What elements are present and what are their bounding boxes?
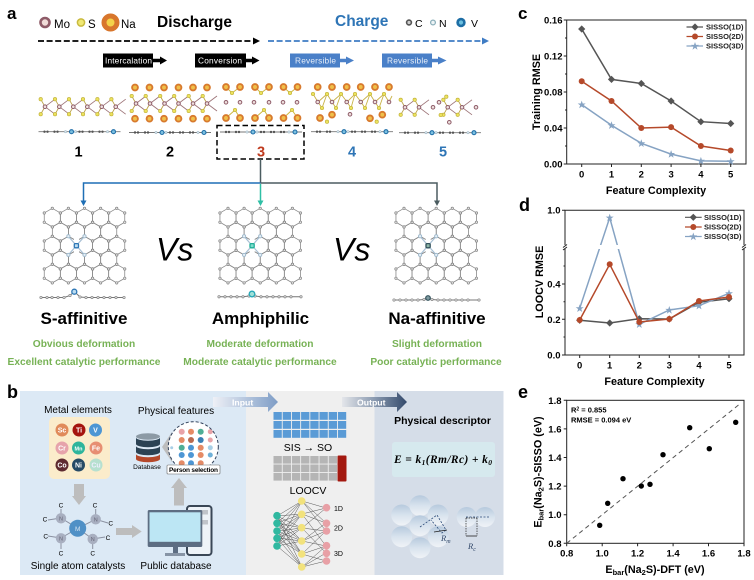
legend: C N V atoms: N xyxy=(439,18,447,30)
fit statistics: RMSE = 0.094 eV xyxy=(571,416,631,424)
single atom catalyst molecule: C xyxy=(108,520,113,528)
lattice: Amphiphilic side view xyxy=(219,291,301,297)
y tick labels: 1.8 xyxy=(548,396,562,407)
note: Moderate catalytic performance: Moderate catalytic performance xyxy=(183,357,337,368)
label: 3D: 3D xyxy=(334,551,343,558)
legend xyxy=(685,213,742,241)
x tick labels: 1.6 xyxy=(702,549,715,560)
state number 5: 5 xyxy=(439,144,447,160)
legend: SISSO(2D) xyxy=(706,32,744,41)
panel label b: b xyxy=(7,382,18,402)
y tick labels: 1.2 xyxy=(548,482,562,493)
arrow: Output: Output xyxy=(357,398,386,408)
x tick labels xyxy=(579,170,734,180)
y tick labels: 0.12 xyxy=(544,52,562,62)
x tick labels: 1.4 xyxy=(666,549,680,560)
state number 1: 1 xyxy=(74,144,83,160)
x axis title: Feature Complexity xyxy=(606,185,706,197)
legend: SISSO(1D) xyxy=(704,213,742,222)
periodic element card: Cu xyxy=(91,462,101,470)
note: Obvious deformation: Obvious deformation xyxy=(33,339,135,350)
x tick labels: 2 xyxy=(639,170,644,180)
note: Moderate deformation: Moderate deformation xyxy=(207,339,313,350)
y tick labels xyxy=(544,16,563,170)
x tick labels: 1 xyxy=(607,360,613,372)
neural network xyxy=(273,497,330,571)
x tick labels: 0 xyxy=(577,360,582,372)
y axis title: LOOCV RMSE xyxy=(534,246,546,318)
x tick labels: 1 xyxy=(609,170,615,180)
step: Reversible 2 xyxy=(382,54,446,68)
label: LOOCV: LOOCV xyxy=(290,485,326,497)
single atom catalyst molecule: M xyxy=(75,526,80,533)
panel b: workflow xyxy=(7,382,504,575)
single atom catalyst molecule: N xyxy=(91,537,95,543)
single atom catalyst molecule: C xyxy=(43,516,48,524)
heading: S-affinitive: S-affinitive xyxy=(41,309,127,328)
x tick labels: 3 xyxy=(667,360,672,372)
legend: SISSO(2D) xyxy=(704,222,742,232)
label: Public database: Public database xyxy=(140,561,212,572)
parity dashed line xyxy=(567,403,741,543)
y tick labels: 0.08 xyxy=(544,88,562,98)
note: Excellent catalytic performance: Excellent catalytic performance xyxy=(8,357,161,368)
periodic element card: Ni xyxy=(75,462,82,470)
legend: Mo S Na atoms: Mo xyxy=(54,19,70,31)
series SISSO(1D) xyxy=(580,299,729,323)
y tick labels: 0.8 xyxy=(548,539,562,550)
arrow: charge dashed xyxy=(268,38,489,44)
label: SIS to SO: SIS → SO xyxy=(284,442,332,454)
arrow: down to catalysts xyxy=(72,484,86,505)
lattice: S-affinitive top view xyxy=(44,208,125,283)
legend: Mo S Na atoms: S xyxy=(88,19,96,31)
panel label d: d xyxy=(519,195,530,215)
heading: Charge: Charge xyxy=(335,13,389,30)
y tick labels: 1.6 xyxy=(548,424,562,435)
y tick labels: 1.4 xyxy=(548,453,562,464)
periodic element card: Mn xyxy=(75,446,83,452)
series SISSO(3D) xyxy=(582,105,731,161)
feature selection circle xyxy=(168,422,218,472)
label: Database: Database xyxy=(133,464,161,471)
periodic element card: Sc xyxy=(58,428,66,434)
arrow: discharge dashed xyxy=(38,38,260,44)
scatter points xyxy=(597,420,738,528)
background: descriptor section xyxy=(374,391,504,575)
panel d: LOOCV RMSE chart xyxy=(519,195,746,388)
y tick labels: 0.2 xyxy=(547,315,560,326)
heading: Na-affinitive: Na-affinitive xyxy=(388,309,486,328)
atom pair diagram xyxy=(457,507,495,552)
heading: Metal elements: Metal elements xyxy=(44,405,112,416)
axes and ticks xyxy=(564,20,746,167)
SIS feature grid xyxy=(274,412,346,438)
periodic element card: Fe xyxy=(92,446,100,452)
y tick labels: 0.00 xyxy=(544,160,562,170)
arrow: right to database xyxy=(116,525,142,538)
x tick labels: 1.0 xyxy=(596,549,609,560)
LOOCV selection grid xyxy=(274,456,346,482)
step: Reversible 1: Reversible xyxy=(295,56,336,66)
wedge from database to feature circle xyxy=(162,432,172,462)
Vs text 2: Vs xyxy=(333,232,370,268)
step: Intercalation xyxy=(103,54,167,68)
x tick labels: 4 xyxy=(696,360,702,372)
periodic element card: Cr xyxy=(58,446,66,452)
atom pair diagram: Rc xyxy=(467,541,476,552)
legend: C N V atoms: C xyxy=(415,18,423,30)
arrow: Input xyxy=(213,392,278,412)
panel label a: a xyxy=(7,4,17,23)
arrow: up to features xyxy=(171,478,187,506)
series SISSO(3D) xyxy=(580,218,729,324)
legend: Mo S Na atoms xyxy=(40,16,136,31)
single atom catalyst molecule: N xyxy=(59,536,63,542)
x tick labels: 1.8 xyxy=(737,549,751,560)
lattice: Amphiphilic top view xyxy=(220,208,300,283)
panel a: discharge and charge process xyxy=(7,4,502,368)
formula box xyxy=(392,442,495,477)
single atom catalyst molecule: C xyxy=(59,502,64,510)
legend: SISSO(1D) xyxy=(706,22,744,32)
background: screening section xyxy=(246,391,374,575)
lattice: S-affinitive side view xyxy=(41,289,124,298)
Vs text 1: Vs xyxy=(156,232,193,268)
x tick labels: 3 xyxy=(668,170,674,180)
single atom catalyst molecule: N xyxy=(59,516,63,522)
y tick labels: 0.4 xyxy=(547,280,561,290)
single atom catalyst molecule: C xyxy=(90,550,95,558)
single atom catalyst molecule: N xyxy=(94,518,98,524)
note: Poor catalytic performance: Poor catalytic performance xyxy=(370,357,502,368)
legend: C N V atoms: V xyxy=(471,18,478,30)
fit statistics: R2 = 0.855 xyxy=(571,406,607,414)
heading: Amphiphilic: Amphiphilic xyxy=(212,309,309,328)
y tick labels xyxy=(548,396,562,550)
x tick labels xyxy=(577,360,732,372)
legend: C N V atoms xyxy=(407,18,478,30)
x tick labels: 2 xyxy=(637,360,642,372)
panel label e: e xyxy=(518,382,528,402)
label: Single atom catalysts: Single atom catalysts xyxy=(31,561,125,572)
dashed selection box xyxy=(217,126,304,159)
structure 5 xyxy=(399,95,481,135)
series SISSO(2D) xyxy=(582,81,731,150)
legend: SISSO(3D) xyxy=(706,42,744,50)
state number 2: 2 xyxy=(166,144,174,160)
step: Conversion xyxy=(195,54,260,68)
step: Conversion: Conversion xyxy=(198,56,242,66)
series SISSO(2D) xyxy=(580,264,729,322)
x tick labels: 0 xyxy=(579,170,584,180)
periodic element card: Co xyxy=(57,462,67,470)
single atom catalyst molecule: C xyxy=(93,502,98,510)
x tick labels: 1.2 xyxy=(631,549,644,560)
y axis title: Ebar(Na2S)-SISSO (eV) xyxy=(532,416,546,528)
sphere packing diagram: Rm xyxy=(440,533,451,544)
label: Person selection: Person selection xyxy=(169,467,218,474)
fit statistics xyxy=(571,406,631,424)
y tick labels: 0.04 xyxy=(544,124,563,134)
structure 3 xyxy=(220,84,302,134)
x tick labels: 5 xyxy=(726,360,732,372)
y axis title: Training RMSE xyxy=(531,54,543,130)
y tick labels: 1.0 xyxy=(548,510,562,521)
legend: Mo S Na atoms: Na xyxy=(121,19,136,31)
state number 4: 4 xyxy=(348,144,356,160)
step: Intercalation: Intercalation xyxy=(105,56,152,66)
x tick labels xyxy=(560,549,751,560)
sphere packing diagram xyxy=(391,495,451,558)
axes and ticks xyxy=(562,210,746,358)
axis break gap xyxy=(566,245,743,249)
heading: Physical descriptor: Physical descriptor xyxy=(394,415,491,427)
label: 2D: 2D xyxy=(334,526,343,532)
label: 1D: 1D xyxy=(334,506,343,513)
periodic element card: Ti xyxy=(76,428,82,434)
structure 2 xyxy=(129,85,217,134)
periodic element card xyxy=(49,417,110,479)
y tick labels: 1.0 xyxy=(547,206,560,216)
formula box: E = k1(Rm/Rc) + k0 xyxy=(393,454,492,467)
x tick labels: 0.8 xyxy=(560,549,573,560)
y tick labels: 0.16 xyxy=(544,16,562,26)
x tick labels: 5 xyxy=(728,170,734,180)
panel e: parity scatter plot xyxy=(518,382,751,577)
structure 1 xyxy=(38,98,126,134)
series SISSO(1D) xyxy=(582,29,731,124)
panel c: training RMSE chart xyxy=(518,4,746,197)
step: Reversible 2: Reversible xyxy=(387,56,428,66)
state number 3: 3 xyxy=(257,144,265,160)
single atom catalyst molecule xyxy=(43,502,113,558)
background: data section xyxy=(20,391,246,575)
single atom catalyst molecule: C xyxy=(106,535,111,542)
connector tree xyxy=(80,159,440,206)
heading: Physical features: Physical features xyxy=(138,406,214,417)
y tick labels xyxy=(547,206,561,362)
periodic element card: V xyxy=(93,428,98,434)
arrow: Input: Input xyxy=(232,398,253,408)
icon: public database computer xyxy=(148,506,212,556)
axes and ticks xyxy=(564,400,744,546)
single atom catalyst molecule: C xyxy=(59,550,64,558)
x tick labels: 4 xyxy=(698,170,704,180)
legend: SISSO(3D) xyxy=(704,232,742,241)
lattice: Na-affinitive top view xyxy=(396,208,476,283)
note: Slight deformation: Slight deformation xyxy=(392,339,482,350)
icon: database xyxy=(136,433,160,462)
x axis title: Ebar(Na2S)-DFT (eV) xyxy=(605,564,705,577)
x axis title: Feature Complexity xyxy=(604,376,705,388)
lattice: Na-affinitive side view xyxy=(394,296,479,300)
panel label c: c xyxy=(518,4,527,23)
legend xyxy=(686,22,744,50)
y tick labels: 0.0 xyxy=(547,350,560,362)
step: Reversible 1 xyxy=(290,54,354,68)
single atom catalyst molecule: C xyxy=(43,534,48,540)
structure 4 xyxy=(311,84,393,134)
arrow: Output xyxy=(342,392,407,412)
heading: Discharge: Discharge xyxy=(157,14,232,31)
